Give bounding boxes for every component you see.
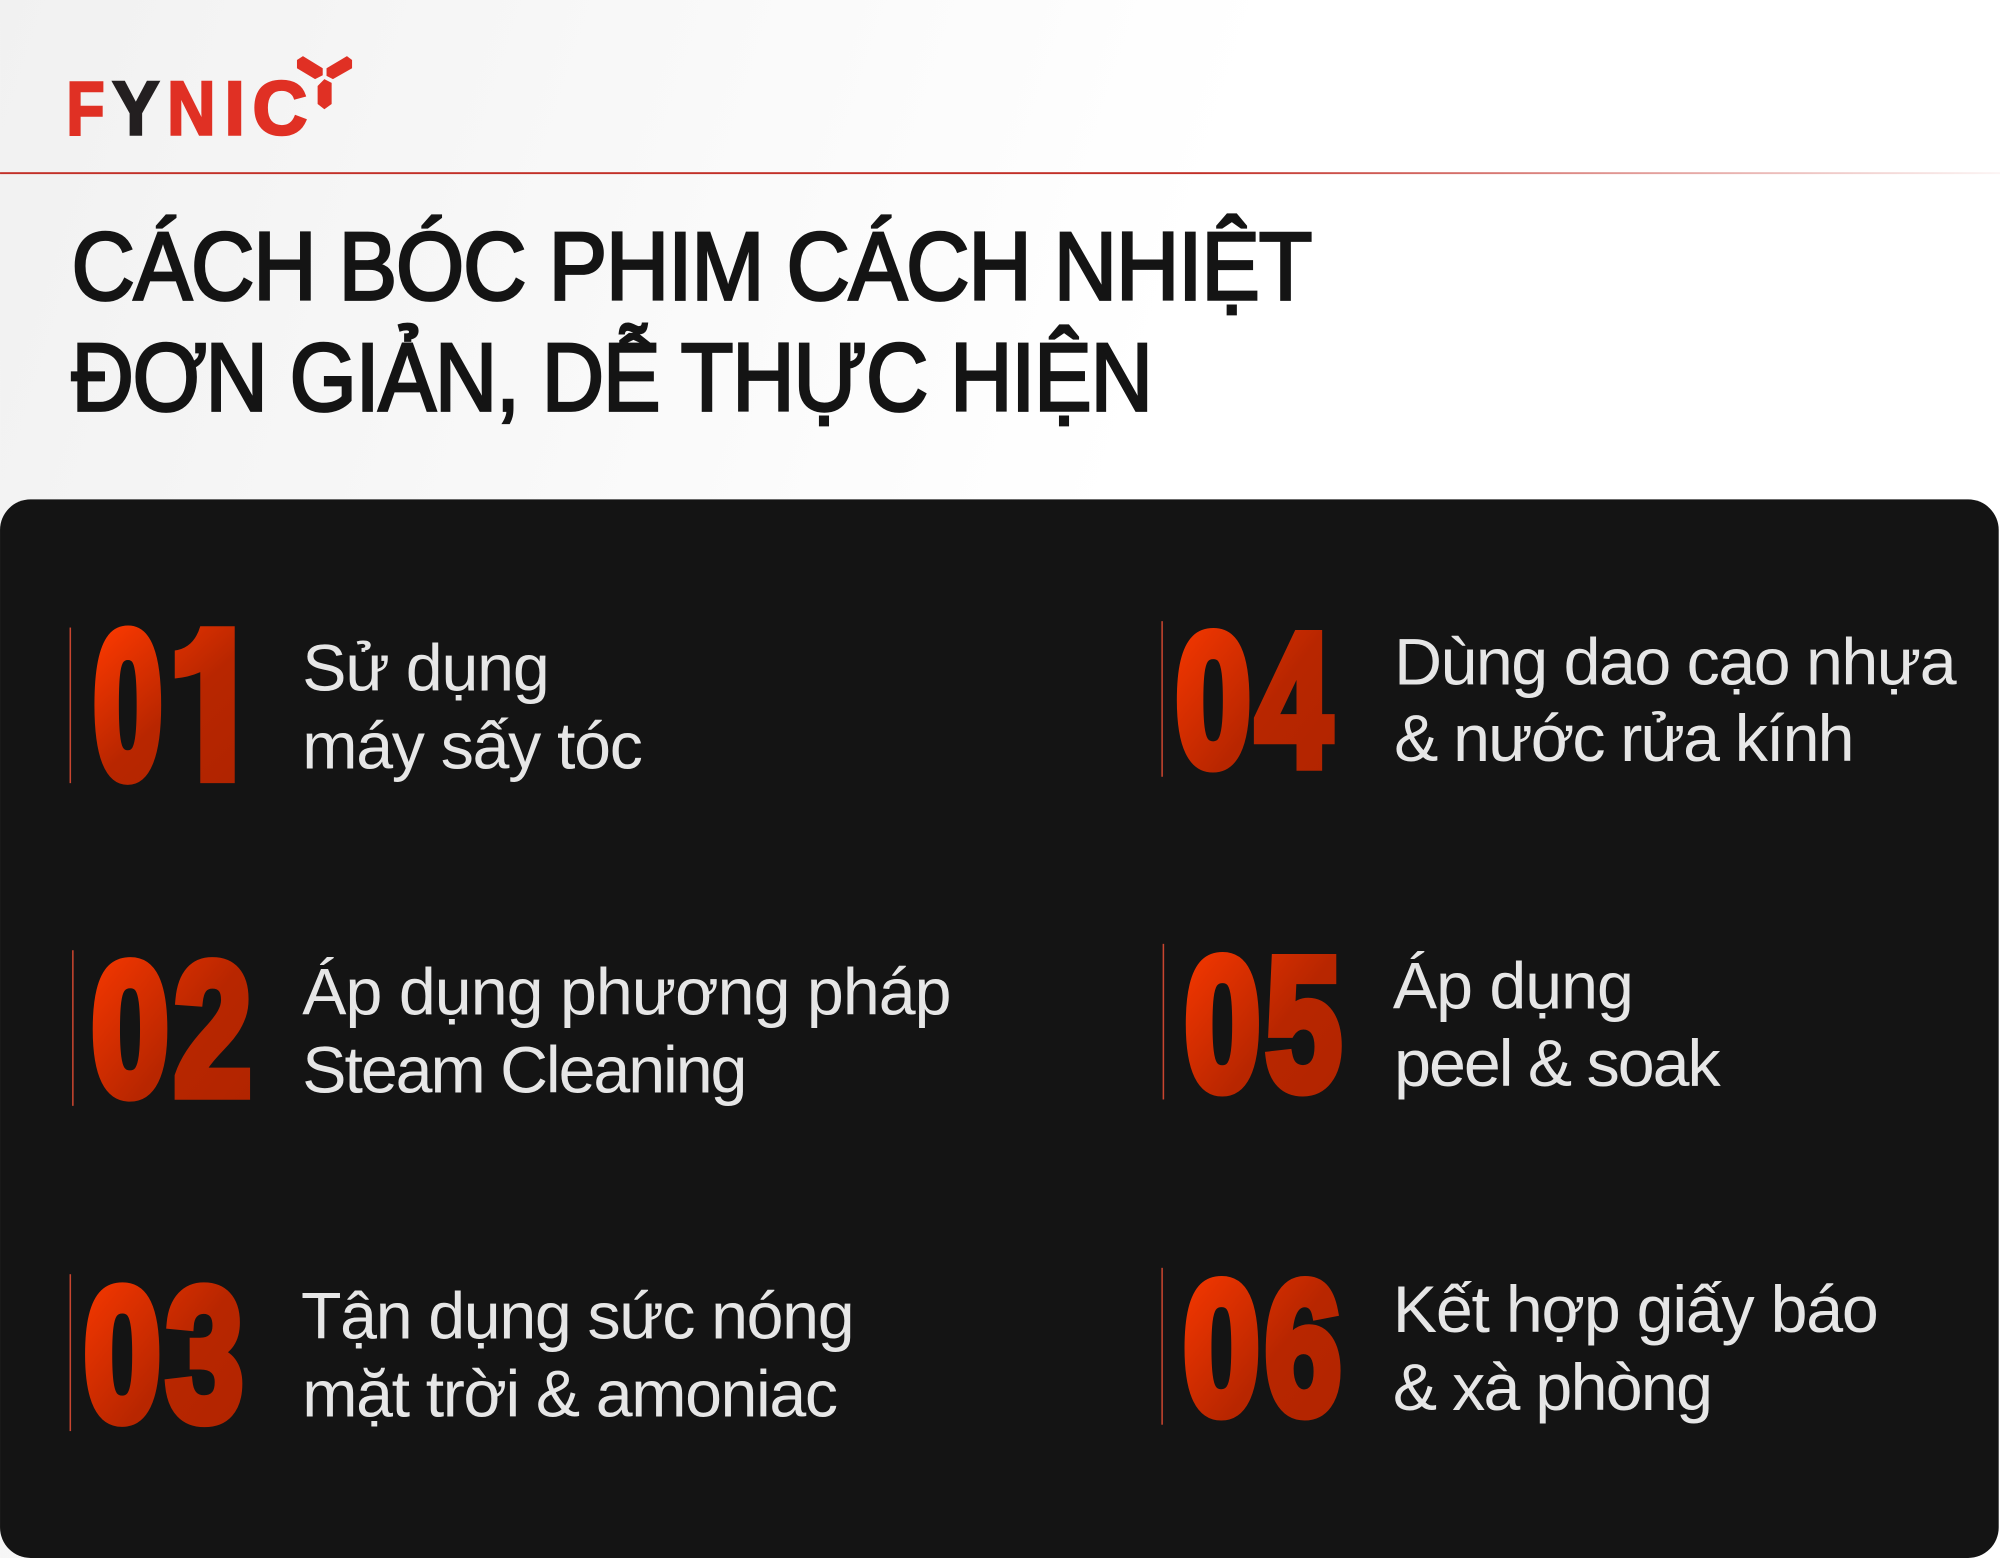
logo: FYNIC: I xyxy=(225,67,245,152)
logo: FYNIC: F xyxy=(66,67,105,152)
step 04: Dùng dao cạo nhựa xyxy=(1394,625,1957,699)
step 01 xyxy=(70,626,642,785)
step 01: máy sấy tóc xyxy=(302,709,643,783)
step 06 xyxy=(1161,1243,1879,1454)
logo: FYNIC: C xyxy=(253,67,307,152)
step 06: Kết hợp giấy báo xyxy=(1393,1273,1879,1347)
step 02: Áp dụng phương pháp xyxy=(302,956,952,1030)
logo: FYNIC xyxy=(66,56,352,152)
title: ĐƠN GIẢN, DỄ THỰC HIỆN xyxy=(71,323,1152,432)
panel: steps xyxy=(0,499,1999,1558)
logo: FYNIC: N xyxy=(167,67,216,152)
step 02 xyxy=(72,924,952,1135)
step 04: & nước rửa kính xyxy=(1394,702,1855,776)
step 06: 06 xyxy=(1183,1243,1346,1454)
step 03: 03 xyxy=(84,1250,248,1461)
step 06: & xà phòng xyxy=(1393,1351,1713,1425)
step 02: Steam Cleaning xyxy=(302,1033,747,1107)
divider line xyxy=(0,172,2000,174)
step 01: 01 xyxy=(93,590,240,822)
step 02: 02 xyxy=(91,924,256,1135)
step 05: 05 xyxy=(1184,919,1346,1130)
step 05 xyxy=(1163,919,1721,1130)
step 03 xyxy=(70,1250,855,1461)
step 03: mặt trời & amoniac xyxy=(302,1357,838,1431)
step 04 xyxy=(1161,595,1957,806)
title: CÁCH BÓC PHIM CÁCH NHIỆT xyxy=(71,212,1311,321)
logo: FYNIC: Y xyxy=(112,67,159,152)
step 05: Áp dụng xyxy=(1393,949,1634,1023)
step 03: Tận dụng sức nóng xyxy=(301,1280,855,1354)
step 04: 04 xyxy=(1175,595,1336,806)
step 01: Sử dụng xyxy=(302,632,550,706)
title xyxy=(71,212,1311,432)
step 05: peel & soak xyxy=(1394,1027,1721,1101)
